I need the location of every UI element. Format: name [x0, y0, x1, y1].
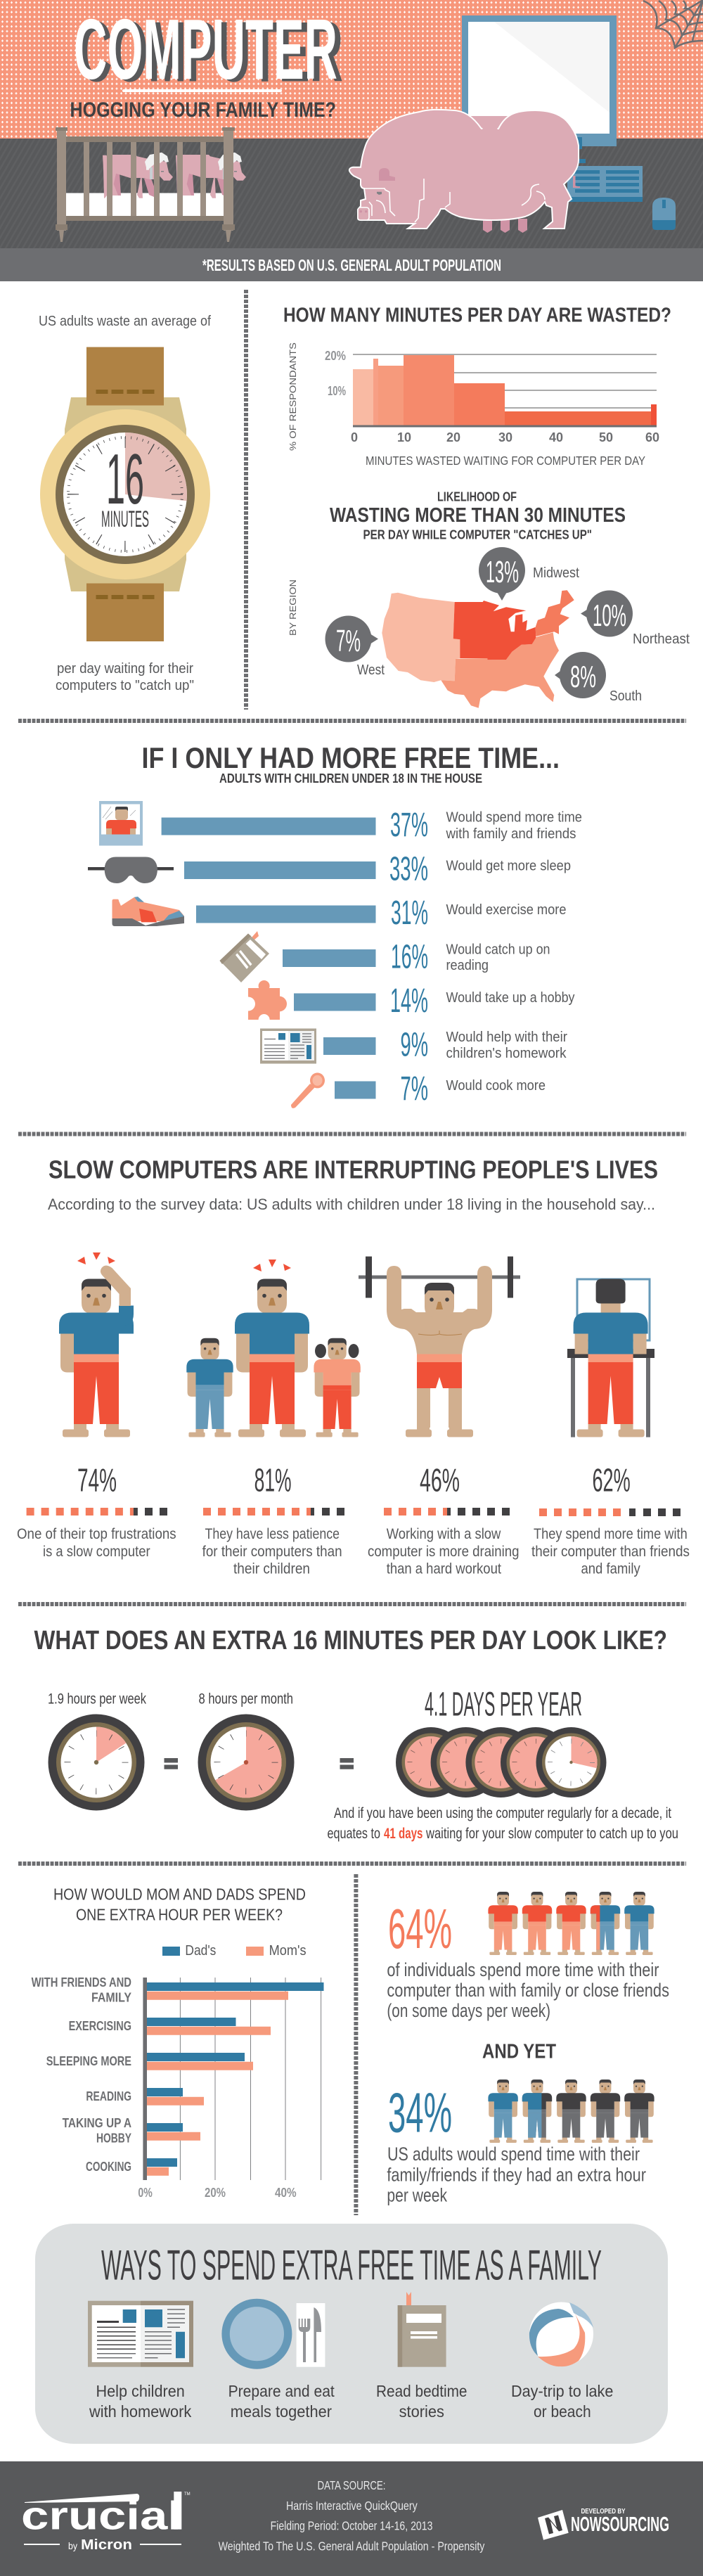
computer monitor [462, 15, 617, 163]
heading: IF I ONLY HAD MORE FREE TIME... [142, 741, 560, 774]
panel: mom and dad chart [32, 1885, 323, 2200]
clock: per month [198, 1691, 294, 1810]
callout: northeast: 10% [593, 598, 626, 633]
logo: crucial by micron: TM [184, 2492, 191, 2497]
logo: crucial by micron: Micron [81, 2537, 132, 2553]
item: stories: Read bedtime [376, 2382, 467, 2400]
bar chart [325, 349, 659, 444]
watch intro text: US adults waste an average of [39, 313, 211, 329]
stat: 64 percent: 64% [388, 1897, 452, 1960]
logo: nowsourcing: DEVELOPED BY [581, 2508, 626, 2516]
stat: 34 percent: 34% [388, 2082, 452, 2144]
callout: west: 7% [336, 624, 361, 658]
heading: WASTING MORE THAN 30 MINUTES [330, 504, 626, 527]
row: sleep: 33% [389, 851, 428, 887]
row: reading: Would catch up on [446, 941, 550, 957]
decade text: equates to [328, 1826, 380, 1842]
stat: 34 percent: per week [387, 2185, 448, 2206]
heading: PER DAY WHILE COMPUTER "CATCHES UP" [363, 527, 592, 542]
icon: sleep mask [88, 857, 174, 883]
figure: man at computer [567, 1279, 654, 1437]
stat: 62 percent: and family [581, 1561, 640, 1577]
callout: northeast [581, 591, 690, 647]
stat: 81 percent: 81% [254, 1461, 292, 1498]
keyboard [567, 166, 643, 202]
icon: puzzle piece [241, 980, 287, 1025]
row: homework: 9% [401, 1027, 428, 1063]
icon: open book [88, 2301, 193, 2367]
figure: girl [314, 1338, 361, 1437]
clock: per week: 1.9 hours per week [48, 1691, 146, 1707]
title: COMPUTER [79, 4, 343, 100]
stat: 34 percent: family/friends if they had an extra hour [387, 2165, 646, 2186]
bar chart: 0 [351, 430, 358, 444]
icon: storybook [398, 2292, 446, 2367]
results note band [0, 248, 703, 281]
subtitle: HOGGING YOUR FAMILY TIME? [70, 98, 336, 122]
bar chart: 10 [397, 430, 411, 444]
panel: minutes wasted chart [283, 304, 671, 468]
icon: book [219, 931, 269, 982]
stat: 62 percent: 62% [592, 1461, 631, 1498]
stat: 46 percent: 46% [420, 1461, 460, 1498]
callout: south [555, 652, 642, 704]
stat: 81 percent: their children [233, 1561, 310, 1577]
clocks: per year [396, 1686, 606, 1798]
stat: 81 percent: They have less patience [205, 1526, 340, 1542]
horizontal bar chart: 0% [138, 2186, 153, 2200]
icon: mirror [99, 801, 143, 845]
row: cook: Would cook more [446, 1077, 546, 1094]
horizontal bar chart [32, 1975, 323, 2200]
watch closing text [56, 660, 194, 693]
logo: crucial by micron: by [68, 2540, 77, 2551]
heading [330, 489, 626, 542]
row: homework: Would help with their [446, 1029, 567, 1045]
crib with piglets [56, 127, 246, 242]
callout: west: West [357, 662, 385, 678]
data source [219, 2478, 485, 2553]
item: beach: or beach [534, 2402, 591, 2421]
horizontal bar chart: TAKING UP A [63, 2116, 131, 2130]
horizontal bar chart: SLEEPING MORE [46, 2054, 131, 2068]
horizontal bar chart: HOBBY [96, 2132, 131, 2146]
stat: 46 percent: computer is more draining [368, 1544, 519, 1560]
figure: dad [235, 1279, 309, 1437]
row: cook [291, 1070, 546, 1108]
legend: Mom's [269, 1942, 307, 1959]
icon: big pig [349, 110, 579, 233]
heading: HOW WOULD MOM AND DADS SPEND [53, 1885, 306, 1904]
horizontal bar chart: EXERCISING [69, 2019, 131, 2033]
y axis title: % OF RESPONDANTS [288, 342, 298, 451]
icon: wrist watch: 16 [106, 440, 144, 519]
row: reading: 16% [391, 938, 428, 976]
icon: cobweb [643, 0, 703, 48]
people row: blue [488, 2080, 654, 2143]
item: homework [88, 2301, 193, 2421]
bar chart: 40 [549, 430, 563, 444]
stat: 74 percent: 74% [77, 1461, 117, 1498]
watch closing text: computers to "catch up" [56, 677, 194, 693]
figure: frustrated man [59, 1252, 134, 1437]
bar chart: 60 [645, 430, 659, 444]
horizontal bar chart: COOKING [86, 2160, 131, 2174]
item: homework: with homework [89, 2402, 192, 2421]
bar chart: 50 [599, 430, 613, 444]
results note band: *RESULTS BASED ON U.S. GENERAL ADULT POPULATION [202, 256, 501, 274]
callout: northeast: Northeast [633, 631, 690, 647]
intro text: According to the survey data: US adults with children under 18 living in the household say... [48, 1196, 655, 1213]
mouse [652, 198, 676, 230]
stat: 74 percent: is a slow computer [43, 1544, 150, 1560]
stat: 34 percent: US adults would spend time with their [387, 2144, 640, 2165]
item: stories: stories [399, 2402, 444, 2421]
people row: red [488, 1892, 654, 1955]
item: meals: meals together [231, 2402, 332, 2421]
footer [0, 2461, 703, 2576]
equals sign [165, 1758, 178, 1769]
legend [162, 1942, 307, 1959]
decade text: 41 days [384, 1826, 423, 1842]
figure: weightlifter [359, 1257, 520, 1437]
row: cook: 7% [401, 1070, 428, 1108]
row: homework: children's homework [446, 1045, 567, 1061]
panel: regional likelihood [288, 489, 690, 708]
row: homework [260, 1027, 567, 1063]
subheading: ADULTS WITH CHILDREN UNDER 18 IN THE HOUSE [219, 771, 482, 786]
icon: wrist watch: MINUTES [101, 506, 149, 532]
data source: Fielding Period: October 14-16, 2013 [271, 2519, 432, 2533]
legend: Dad's [185, 1942, 216, 1959]
callout: midwest [479, 547, 579, 601]
title: COMPUTER [74, 1, 337, 97]
icon: plate and cutlery [221, 2299, 325, 2369]
icon: sneaker [112, 897, 184, 926]
data source: Harris Interactive QuickQuery [286, 2499, 418, 2513]
row: family and friends: with family and friends [446, 826, 576, 842]
row: exercise [112, 895, 567, 932]
stat: 34 percent [387, 2080, 654, 2206]
item: meals: Prepare and eat [228, 2382, 335, 2400]
stat: 81 percent [202, 1461, 344, 1577]
row: hobby [241, 980, 575, 1025]
axis label: BY REGION [288, 579, 298, 636]
heading: ONE EXTRA HOUR PER WEEK? [76, 1906, 283, 1924]
stat: 64 percent [387, 1892, 669, 2021]
x axis title: MINUTES WASTED WAITING FOR COMPUTER PER DAY [366, 454, 645, 468]
logo: crucial by micron: crucial [21, 2494, 181, 2539]
logo: crucial by micron [21, 2492, 191, 2553]
stat: 74 percent: One of their top frustrations [17, 1526, 176, 1542]
data source: Weighted To The U.S. General Adult Population - Propensity [219, 2539, 485, 2553]
row: exercise: 31% [391, 895, 428, 932]
row: exercise: Would exercise more [446, 902, 567, 918]
panel: watch [39, 313, 211, 693]
stat: 46 percent: Working with a slow [387, 1526, 501, 1542]
callout: south: 8% [570, 660, 596, 694]
callout: midwest: Midwest [533, 565, 579, 581]
callout: west [325, 616, 385, 678]
horizontal bar chart: 20% [205, 2186, 226, 2200]
data source: DATA SOURCE: [318, 2478, 385, 2492]
logo: nowsourcing [538, 2508, 669, 2540]
figure: parent with children [186, 1260, 361, 1437]
icon: beach ball [529, 2302, 593, 2366]
panel: more free time [88, 741, 582, 1108]
figure: boy [186, 1338, 233, 1437]
callout: midwest: 13% [486, 555, 519, 589]
callout: south: South [610, 688, 642, 704]
heading: LIKELIHOOD OF [437, 489, 517, 504]
stat: 64 percent: (on some days per week) [387, 2000, 550, 2021]
row: family and friends [99, 801, 582, 845]
and yet: AND YET [482, 2041, 556, 2063]
panel: extra sixteen minutes [34, 1626, 678, 1842]
item: beach [511, 2302, 613, 2421]
bar chart: 20 [446, 430, 460, 444]
horizontal bar chart: FAMILY [91, 1991, 131, 2005]
stat: 81 percent: for their computers than [202, 1544, 342, 1560]
stat: 46 percent: than a hard workout [387, 1561, 501, 1577]
header banner [0, 0, 703, 281]
icon: piglet one [103, 153, 173, 198]
horizontal bar chart: WITH FRIENDS AND [32, 1975, 131, 1989]
equals sign [340, 1758, 354, 1769]
panel: ways to spend extra free time [35, 2224, 668, 2444]
bar chart: 10% [328, 384, 346, 398]
row: hobby: Would take up a hobby [446, 989, 575, 1006]
item: homework: Help children [96, 2382, 185, 2400]
row: sleep: Would get more sleep [446, 858, 571, 873]
stat: 62 percent [531, 1461, 690, 1577]
item: beach: Day-trip to lake [511, 2382, 613, 2400]
horizontal bar chart: READING [86, 2089, 131, 2103]
decade text [328, 1805, 678, 1842]
horizontal bar chart: 40% [275, 2186, 297, 2200]
row: sleep [88, 851, 571, 887]
icon: open textbook [260, 1028, 316, 1063]
clock: per month: 8 hours per month [198, 1691, 293, 1707]
row: family and friends: Would spend more time [446, 809, 582, 826]
item: stories [376, 2292, 467, 2421]
us map [382, 590, 574, 708]
row: family and friends: 37% [390, 807, 428, 844]
item: meals [221, 2299, 335, 2421]
icon: piglet two [176, 153, 246, 198]
panel: individuals stats [387, 1892, 669, 2206]
stat: 46 percent [368, 1461, 519, 1577]
title [74, 1, 343, 100]
icon: spoon [291, 1072, 325, 1108]
bar chart: 30 [498, 430, 512, 444]
bar chart: 20% [325, 349, 346, 363]
panel: slow computers [17, 1155, 690, 1577]
icon: wrist watch [40, 347, 210, 641]
row: hobby: 14% [390, 982, 428, 1020]
stat: 62 percent: their computer than friends [531, 1544, 690, 1560]
row: reading: reading [446, 957, 489, 973]
heading [53, 1885, 306, 1924]
row: reading [219, 931, 550, 982]
stat: 74 percent [17, 1461, 176, 1560]
watch closing text: per day waiting for their [57, 660, 193, 677]
clock: per week [48, 1691, 146, 1810]
